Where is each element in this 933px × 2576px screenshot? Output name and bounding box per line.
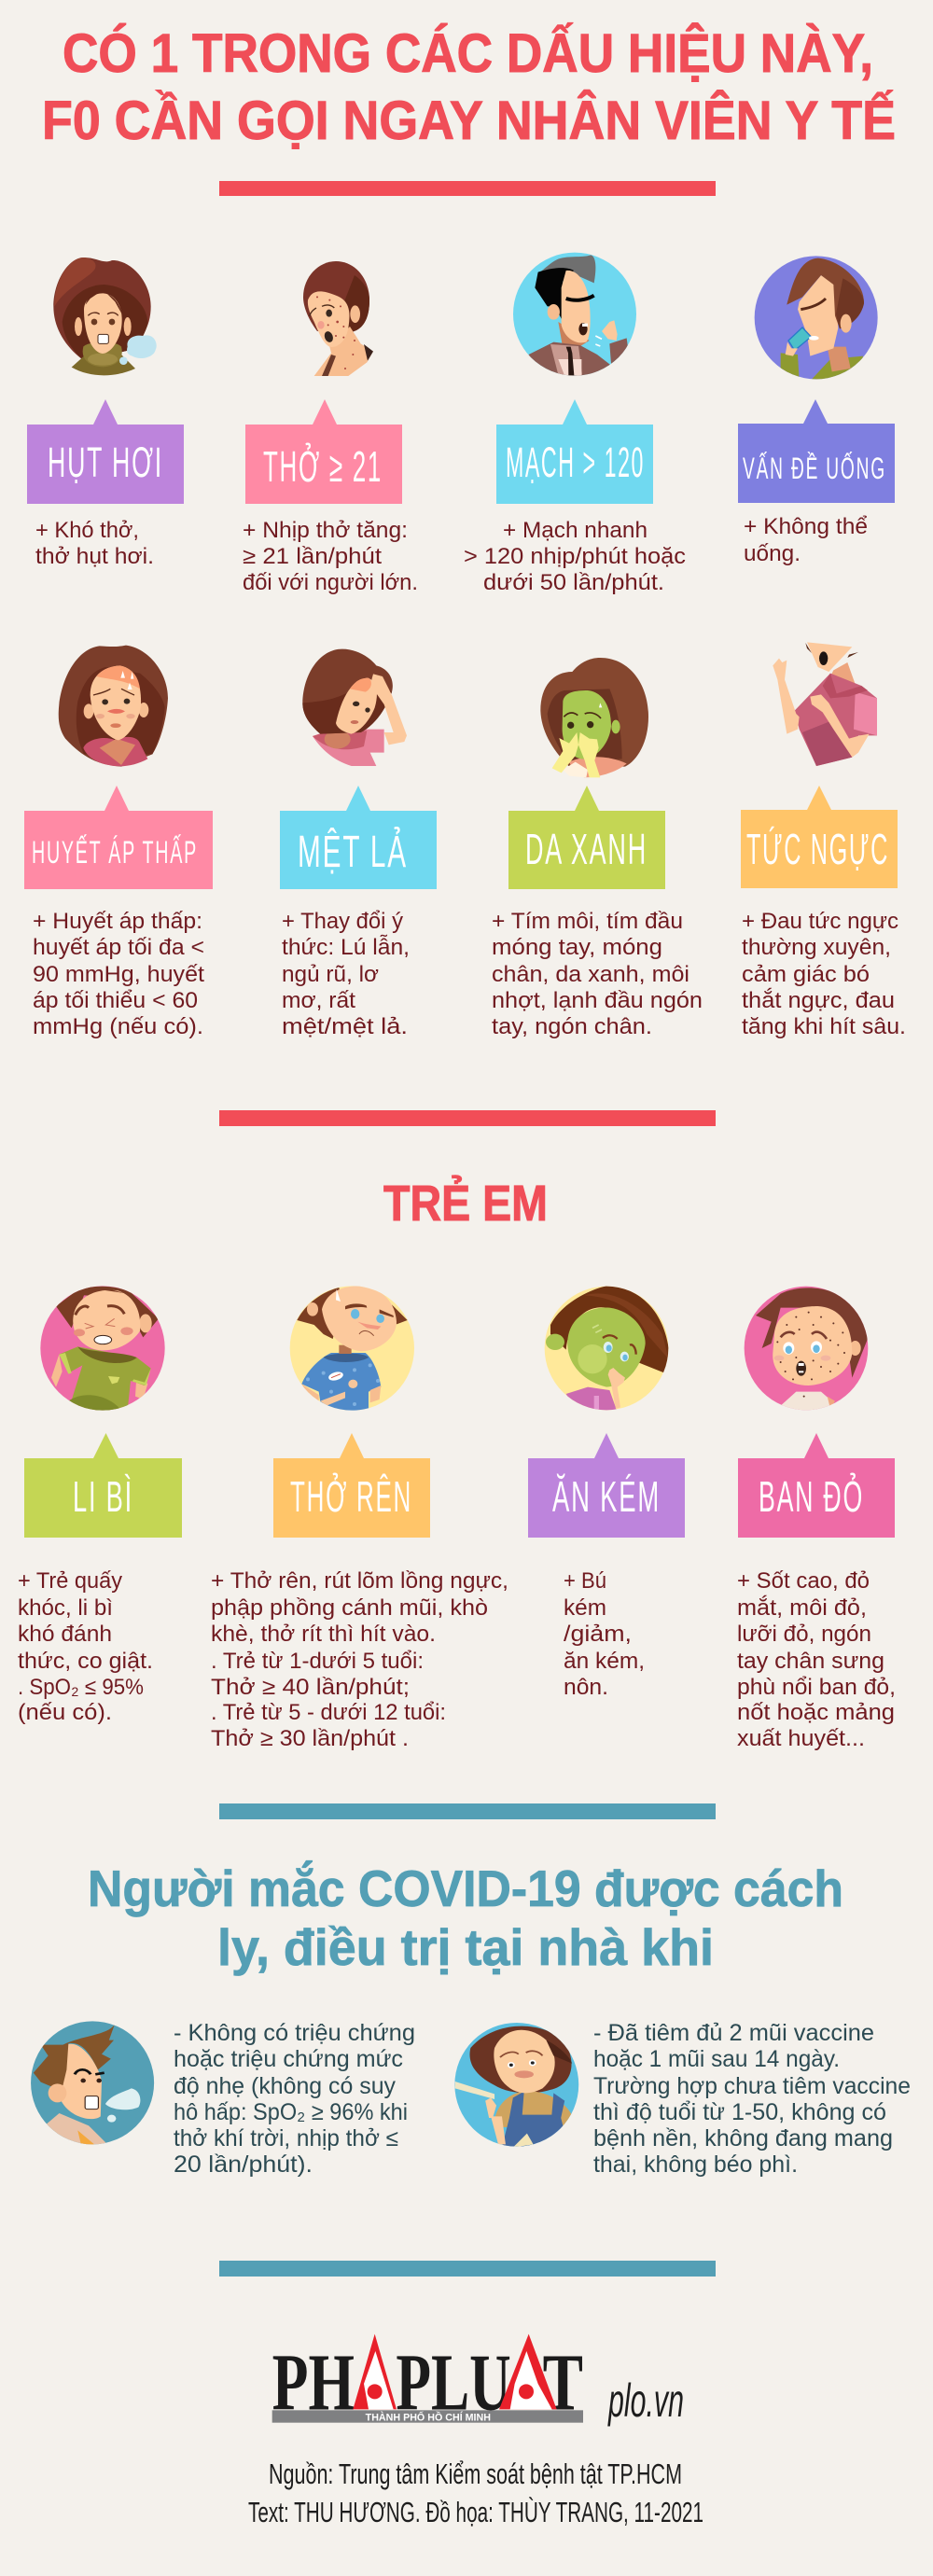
text: ăn kém: ăn kém, xyxy=(564,1649,645,1674)
website: plo.vn: plo.vn xyxy=(607,2374,684,2427)
text: ban đỏ: xuất huyết... xyxy=(737,1726,865,1751)
label: hụt hơi: HỤT HƠI xyxy=(48,439,163,486)
label: mạch > 120: MẠCH > 120 xyxy=(506,439,645,486)
text: ban đỏ: phù nổi ban đỏ, xyxy=(737,1675,896,1700)
text: thở rên: Thở ≥ 30 lần/phút . xyxy=(211,1726,409,1751)
text: mệt lả: mơ, rất xyxy=(282,988,355,1013)
panel: li bì xyxy=(18,1286,182,1725)
text: thở rên xyxy=(211,1568,508,1751)
icon: woman sweating xyxy=(59,646,168,767)
logo: Pháp Luật xyxy=(272,2334,583,2427)
text: vấn đề uống: uống. xyxy=(744,541,801,566)
text: adult conditions: hô hấp: SpO₂ ≥ 96% khi xyxy=(174,2099,408,2125)
callout: thở ≥ 21 xyxy=(245,399,402,504)
heading: home treatment xyxy=(88,1859,843,1976)
callout: mệt lả xyxy=(280,786,437,889)
logo: Pháp Luật: PH xyxy=(272,2336,355,2427)
panel: ban đỏ xyxy=(737,1287,896,1751)
icon: girl with thermometer xyxy=(454,2023,578,2148)
text: mệt lả: thức: Lú lẫn, xyxy=(282,935,410,960)
text: vaccine conditions: thai, không béo phì. xyxy=(593,2151,798,2178)
heading: home treatment: Người mắc COVID-19 được cách xyxy=(88,1859,843,1917)
text: da xanh xyxy=(492,909,703,1039)
text: mệt lả: mệt/mệt lả. xyxy=(282,1014,408,1039)
text: thở ≥ 21: + Nhịp thở tăng: xyxy=(243,518,408,543)
text: li bì: khóc, li bì xyxy=(18,1595,113,1621)
icon: woman holding chest xyxy=(773,642,877,766)
text: tức ngực: tăng khi hít sâu. xyxy=(742,1014,906,1039)
text: da xanh: tay, ngón chân. xyxy=(492,1014,652,1039)
text: adult conditions: thở khí trời, nhịp thở ≤ xyxy=(174,2125,398,2151)
text: ban đỏ xyxy=(737,1568,896,1751)
text: huyết áp thấp: áp tối thiểu < 60 xyxy=(33,988,198,1013)
text: ăn kém xyxy=(564,1568,645,1700)
label: thở ≥ 21: THỞ ≥ 21 xyxy=(263,442,383,491)
icon: child with rash xyxy=(745,1287,868,1412)
text: li bì xyxy=(18,1568,153,1725)
text: huyết áp thấp: 90 mmHg, huyết xyxy=(33,962,204,987)
panel: tức ngực xyxy=(741,642,906,1039)
text: vaccine conditions: bệnh nền, không đang mang xyxy=(593,2125,893,2151)
heading: trẻ em: TRẺ EM xyxy=(383,1176,548,1232)
callout: ban đỏ xyxy=(738,1433,895,1538)
panel: thở rên xyxy=(211,1286,508,1751)
icon: woman with headache xyxy=(302,649,407,766)
icon: man breathing xyxy=(31,2021,154,2146)
text: thở rên: khè, thở rít thì hít vào. xyxy=(211,1622,436,1647)
text: li bì: + Trẻ quấy xyxy=(18,1568,122,1594)
logo: Pháp Luật: PLU xyxy=(396,2336,511,2427)
text: vaccine conditions: - Đã tiêm đủ 2 mũi vaccine xyxy=(593,2020,874,2046)
callout: mạch > 120 xyxy=(496,399,653,504)
text: ăn kém: nôn. xyxy=(564,1675,608,1700)
icon: man unable to drink xyxy=(755,256,878,381)
panel: thở ≥ 21 xyxy=(243,261,418,595)
text: ăn kém: /giảm, xyxy=(564,1622,632,1647)
text: thở rên: + Thở rên, rút lõm lồng ngực, xyxy=(211,1568,508,1594)
text: mệt lả xyxy=(282,909,410,1039)
logo: Pháp Luật: T xyxy=(543,2336,583,2427)
text: adult conditions: 20 lần/phút). xyxy=(174,2151,313,2178)
callout: da xanh xyxy=(508,786,665,889)
callout: thở rên xyxy=(273,1433,430,1538)
title: CÓ 1 TRONG CÁC DẤU HIỆU NÀY, xyxy=(63,23,873,84)
text: ăn kém: + Bú xyxy=(564,1568,606,1594)
text: vaccine conditions: hoặc 1 mũi sau 14 ngày. xyxy=(593,2046,840,2072)
logo: Pháp Luật: THÀNH PHỐ HỒ CHÍ MINH xyxy=(366,2410,491,2423)
panel: ăn kém xyxy=(528,1286,685,1700)
text: thở ≥ 21: đối với người lớn. xyxy=(243,570,418,595)
text: vấn đề uống xyxy=(744,514,868,566)
text: ban đỏ: nốt hoặc mảng xyxy=(737,1700,895,1725)
text: adult conditions: độ nhẹ (không có suy xyxy=(174,2073,396,2099)
text: mạch > 120: + Mạch nhanh xyxy=(503,518,648,543)
text: tức ngực: cảm giác bó xyxy=(742,962,870,987)
label: da xanh: DA XANH xyxy=(525,825,648,873)
text: da xanh: nhợt, lạnh đầu ngón xyxy=(492,988,703,1013)
text: thở rên: . Trẻ từ 1-dưới 5 tuổi: xyxy=(211,1649,424,1674)
icon: person breathing fast xyxy=(303,261,373,376)
text: adult conditions xyxy=(174,2020,415,2178)
panel: mệt lả xyxy=(280,649,437,1039)
credits: Nguồn: Trung tâm Kiểm soát bệnh tật TP.HCM xyxy=(269,2458,682,2490)
panel: home treatment adult xyxy=(31,2020,415,2178)
text: tức ngực xyxy=(742,909,906,1039)
icon: woman short of breath xyxy=(53,258,157,375)
text: thở rên: phập phồng cánh mũi, khò xyxy=(211,1595,488,1621)
text: vaccine conditions: thì độ tuổi từ 1-50, không có xyxy=(593,2099,886,2125)
text: mệt lả: ngủ rũ, lơ xyxy=(282,962,379,987)
text: mạch > 120: dưới 50 lần/phút. xyxy=(483,570,664,595)
text: vaccine conditions xyxy=(593,2020,911,2178)
text: tức ngực: thắt ngực, đau xyxy=(742,988,895,1013)
text: mạch > 120: > 120 nhịp/phút hoặc xyxy=(464,544,686,569)
text: thở rên: Thở ≥ 40 lần/phút; xyxy=(211,1675,410,1700)
text: hụt hơi: + Khó thở, xyxy=(35,518,139,543)
text: vaccine conditions: Trường hợp chưa tiêm vaccine xyxy=(593,2073,911,2099)
text: li bì: (nếu có). xyxy=(18,1700,112,1725)
panel: mạch > 120 xyxy=(464,253,686,595)
title xyxy=(42,23,896,151)
text: adult conditions: hoặc triệu chứng mức xyxy=(174,2046,403,2072)
text: da xanh: chân, da xanh, môi xyxy=(492,962,689,987)
icon: sick child groaning xyxy=(290,1286,414,1412)
text: thở ≥ 21: ≥ 21 lần/phút xyxy=(243,544,382,569)
text: huyết áp thấp: mmHg (nếu có). xyxy=(33,1014,203,1039)
text: hụt hơi: thở hụt hơi. xyxy=(35,544,154,569)
text: li bì: thức, co giật. xyxy=(18,1649,153,1674)
label: ăn kém: ĂN KÉM xyxy=(552,1472,661,1521)
text: li bì: khó đánh xyxy=(18,1622,112,1647)
text: thở rên: . Trẻ từ 5 - dưới 12 tuổi: xyxy=(211,1700,446,1725)
panel: hụt hơi xyxy=(27,258,184,569)
callout: hụt hơi xyxy=(27,399,184,504)
label: mệt lả: MỆT LẢ xyxy=(298,826,408,877)
icon: nauseous child xyxy=(545,1286,669,1412)
text: ban đỏ: tay chân sưng xyxy=(737,1649,884,1674)
icon: woman with green face xyxy=(540,658,648,777)
text: tức ngực: thường xuyên, xyxy=(742,935,891,960)
text: da xanh: móng tay, móng xyxy=(492,935,662,960)
icon: lethargic child xyxy=(40,1286,165,1412)
panel: da xanh xyxy=(492,658,703,1039)
callout: tức ngực xyxy=(741,786,898,888)
text: ban đỏ: mắt, môi đỏ, xyxy=(737,1595,867,1621)
text: ban đỏ: + Sốt cao, đỏ xyxy=(737,1568,870,1594)
panel: home treatment vaccine xyxy=(454,2020,911,2178)
text: li bì: . SpO₂ ≤ 95% xyxy=(18,1675,144,1700)
text: ăn kém: kém xyxy=(564,1595,606,1621)
text: hụt hơi xyxy=(35,518,154,569)
text: huyết áp thấp: + Huyết áp thấp: xyxy=(33,909,202,934)
text: thở ≥ 21 xyxy=(243,518,418,595)
text: da xanh: + Tím môi, tím đầu xyxy=(492,909,683,934)
text: huyết áp thấp: huyết áp tối đa < xyxy=(33,935,204,960)
text: tức ngực: + Đau tức ngực xyxy=(742,909,898,934)
text: mạch > 120 xyxy=(464,518,686,595)
credits xyxy=(248,2458,703,2528)
text: huyết áp thấp xyxy=(33,909,204,1039)
callout: ăn kém xyxy=(528,1433,685,1538)
label: li bì: LI BÌ xyxy=(73,1472,133,1521)
heading: home treatment: ly, điều trị tại nhà khi xyxy=(217,1918,714,1976)
text: vấn đề uống: + Không thể xyxy=(744,514,868,539)
icon: man coughing xyxy=(513,253,636,378)
callout: li bì xyxy=(24,1433,182,1538)
text: adult conditions: - Không có triệu chứng xyxy=(174,2020,415,2046)
panel: huyết áp thấp xyxy=(24,646,213,1039)
callout: huyết áp thấp xyxy=(24,786,213,889)
text: mệt lả: + Thay đổi ý xyxy=(282,909,403,934)
callout: vấn đề uống xyxy=(738,399,895,503)
panel: vấn đề uống xyxy=(738,256,895,566)
label: huyết áp thấp: HUYẾT ÁP THẤP xyxy=(32,835,198,870)
text: ban đỏ: lưỡi đỏ, ngón xyxy=(737,1622,871,1647)
credits: Text: THU HƯƠNG. Đồ họa: THÙY TRANG, 11-2021 xyxy=(248,2496,703,2528)
label: thở rên: THỞ RÊN xyxy=(290,1472,412,1521)
